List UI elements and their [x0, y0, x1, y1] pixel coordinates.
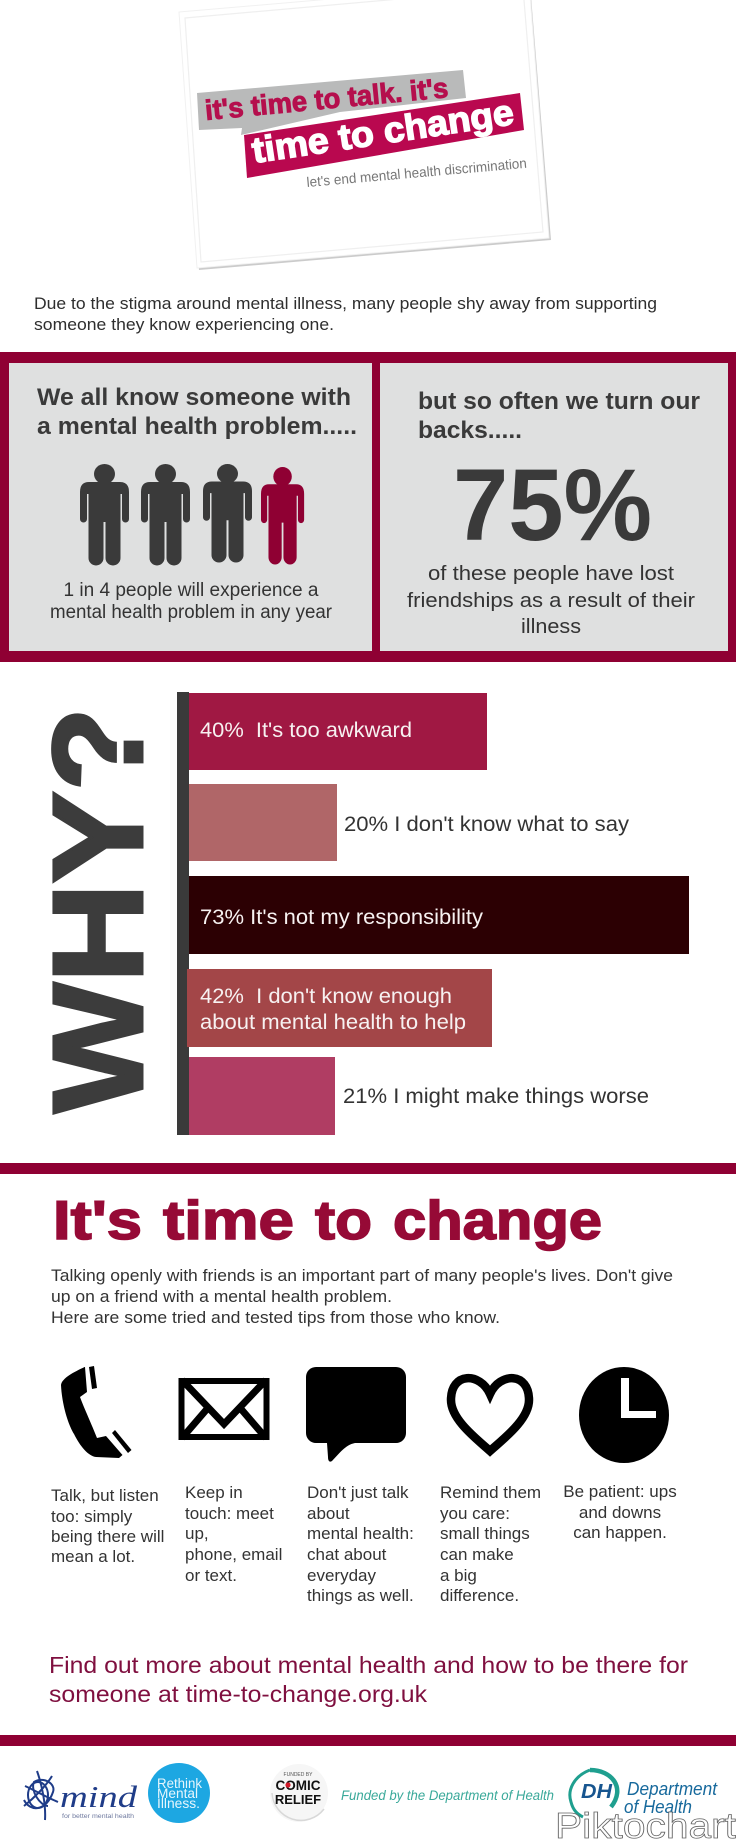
icon: four people, one highlighted [80, 464, 304, 566]
logo: comic relief: FUNDED BY [284, 1772, 313, 1778]
caption: lost friendships [407, 563, 695, 638]
logo card: time to change [179, 0, 551, 270]
logo: comic relief: RELIEF [275, 1792, 321, 1807]
tip: remind them: you care: [440, 1504, 510, 1523]
heading: it's time to change: It's [53, 1189, 142, 1251]
bar: don't know enough 42%: 42% I don't know enough [200, 985, 452, 1008]
tip: don't just talk: chat about [307, 1545, 387, 1564]
heading: we all know someone: a mental health problem..... [37, 413, 357, 440]
paragraph: talking openly [51, 1266, 673, 1327]
logo: department of health: DH [581, 1781, 613, 1803]
logo card: time to change: time to change [249, 91, 516, 171]
bar: don't know enough 42%: about mental health to help [200, 1011, 466, 1034]
tip: keep in touch: up, [185, 1524, 209, 1543]
bar: what to say 20%: 20% I don't know what to say [344, 813, 630, 836]
call to action: someone at time-to-change.org.uk [49, 1681, 428, 1707]
heading: it's time to change: change [393, 1189, 602, 1251]
bar: make things worse 21% [189, 1057, 649, 1135]
tip: don't just talk: mental health: [307, 1524, 414, 1543]
tip: don't just talk [307, 1483, 414, 1605]
caption: lost friendships: friendships as a result of their [407, 590, 695, 612]
tip: don't just talk: everyday [307, 1566, 376, 1585]
bar: what to say 20% [189, 784, 630, 861]
tip: keep in touch: Keep in [185, 1483, 243, 1502]
heading: turn our backs: backs..... [418, 417, 522, 444]
caption: 1 in 4 [50, 580, 333, 623]
panel: 75 percent [380, 363, 728, 651]
tip: talk and listen: being there will [51, 1527, 164, 1546]
heading: it's time to change [53, 1189, 602, 1251]
heading: it's time to change: to [315, 1189, 372, 1251]
heading: we all know someone: We all know someone with [37, 384, 351, 411]
tip: remind them: small things [440, 1524, 530, 1543]
tip: don't just talk: things as well. [307, 1586, 414, 1605]
heading: turn our backs: but so often we turn our [418, 388, 700, 415]
title: WHY?: WHY? [27, 707, 170, 1113]
intro text: Due to the stigma around mental illness, many people shy away from supporting [34, 294, 657, 313]
bar: not my responsibility 73% [189, 876, 689, 954]
tip: keep in touch: phone, email [185, 1545, 282, 1564]
logo: comic relief [270, 1764, 328, 1822]
icon: clock [579, 1367, 669, 1463]
intro text [34, 294, 657, 334]
panel: 1 in 4 people [9, 363, 372, 651]
tip: don't just talk: about [307, 1504, 350, 1523]
logo: comic relief: COMIC [276, 1778, 321, 1793]
logo: department of health [570, 1770, 718, 1817]
logo: department of health: Department [627, 1779, 718, 1799]
bar: not my responsibility 73%: 73% It's not my responsibility [200, 906, 484, 929]
tip: be patient: and downs [579, 1503, 661, 1522]
bar: make things worse 21%: 21% I might make things worse [343, 1085, 649, 1108]
logo: rethink mental illness: Illness. [157, 1796, 200, 1811]
logo: rethink mental illness [148, 1763, 210, 1823]
heading: turn our backs [418, 388, 700, 444]
bar: too awkward 40% [189, 693, 487, 770]
tip: be patient: Be patient: ups [563, 1482, 677, 1501]
bar: too awkward 40%: 40% It's too awkward [200, 719, 412, 742]
tip: talk and listen [51, 1486, 164, 1566]
tip: be patient: can happen. [573, 1523, 667, 1542]
tip: remind them [440, 1483, 541, 1605]
tip: remind them: a big [440, 1566, 477, 1585]
icon: telephone [61, 1366, 132, 1458]
caption: lost friendships: illness [521, 616, 581, 638]
heading: it's time to change: time [163, 1189, 294, 1251]
paragraph: talking openly: up on a friend with a mental health problem. [51, 1287, 392, 1306]
heading: we all know someone [37, 384, 357, 440]
logo: rethink mental illness: Mental [157, 1786, 198, 1801]
call to action: Find out more about mental health and how to be there for [49, 1652, 688, 1678]
tip: remind them: difference. [440, 1586, 519, 1605]
logo: rethink mental illness: Rethink [157, 1776, 202, 1791]
logo: mind: for better mental health [62, 1814, 134, 1820]
icon: heart [451, 1378, 529, 1451]
logo: department of health: of Health [624, 1797, 692, 1817]
logo: mind [24, 1771, 138, 1820]
tip: don't just talk: Don't just talk [307, 1483, 409, 1502]
icon: envelope [182, 1380, 266, 1438]
icon: speech bubble [306, 1367, 406, 1462]
stat: 75%: 75% [453, 448, 652, 562]
caption: lost friendships: of these people have lost [428, 563, 674, 585]
tip: keep in touch: or text. [185, 1566, 237, 1585]
text: funded by: Funded by the Department of Health [341, 1787, 554, 1803]
panel band: stigma statistics [0, 352, 736, 662]
paragraph: talking openly: Here are some tried and tested tips from those who know. [51, 1308, 500, 1327]
tip: remind them: Remind them [440, 1483, 541, 1502]
logo card: time to change: it's time to talk. it's [204, 72, 449, 126]
logo card: time to change: let's end mental health discrimination [306, 155, 527, 190]
call to action [49, 1652, 688, 1707]
tip: be patient [563, 1482, 677, 1542]
tip: remind them: can make [440, 1545, 514, 1564]
bar chart: reasons [177, 692, 689, 1135]
tip: keep in touch [185, 1483, 282, 1585]
tip: talk and listen: mean a lot. [51, 1547, 135, 1566]
intro text: someone they know experiencing one. [34, 315, 334, 334]
caption: 1 in 4: 1 in 4 people will experience a [64, 580, 319, 601]
tip: keep in touch: touch: meet [185, 1504, 274, 1523]
caption: 1 in 4: mental health problem in any year [50, 602, 333, 623]
tip: talk and listen: too: simply [51, 1507, 133, 1526]
logo: mind: mind [60, 1779, 138, 1814]
paragraph: talking openly: Talking openly with friends is an important part of many people's lives. Don't give [51, 1266, 673, 1285]
tip: talk and listen: Talk, but listen [51, 1486, 159, 1505]
bar: don't know enough 42% [187, 969, 492, 1047]
